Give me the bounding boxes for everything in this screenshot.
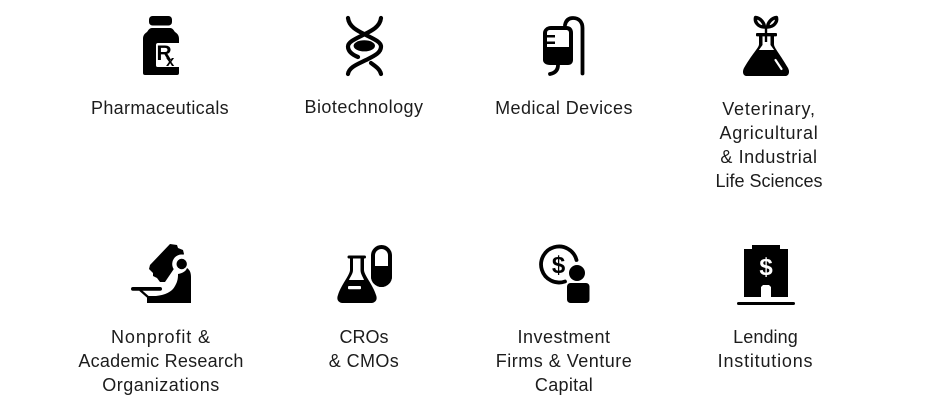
label: Investment Firms and Venture Capital: Investment <box>517 327 611 347</box>
icon: microscope <box>131 244 191 303</box>
label: Nonprofit and Academic Research Organizations: Organizations <box>102 375 220 395</box>
icon: bank building: $ <box>759 254 773 281</box>
icon: investor with dollar coin <box>541 247 590 303</box>
icon: prescription bottle <box>143 16 179 75</box>
label: Biotechnology: Biotechnology <box>305 97 423 117</box>
icon: investor with dollar coin: $ <box>552 252 566 279</box>
label: CROs and CMOs: CROs <box>340 327 388 347</box>
label: Veterinary, Agricultural and Industrial Life Sciences: Agricultural <box>719 123 819 143</box>
label: Nonprofit and Academic Research Organizations <box>78 327 244 395</box>
label: Veterinary, Agricultural and Industrial Life Sciences: Veterinary, <box>722 99 816 119</box>
label: Nonprofit and Academic Research Organizations: Academic Research <box>78 351 244 371</box>
label: Medical Devices: Medical Devices <box>495 98 633 118</box>
label: Investment Firms and Venture Capital: Firms & Venture <box>496 351 632 371</box>
label: Veterinary, Agricultural and Industrial Life Sciences: Life Sciences <box>715 171 823 191</box>
label: Lending Institutions <box>718 327 813 371</box>
label: Lending Institutions: Institutions <box>718 351 813 371</box>
label: Investment Firms and Venture Capital <box>496 327 632 395</box>
label: Veterinary, Agricultural and Industrial Life Sciences: & Industrial <box>720 147 818 167</box>
icon: bank building <box>737 245 795 305</box>
icon: IV bag <box>543 18 582 74</box>
label: CROs and CMOs <box>329 327 399 371</box>
icon: flask and capsule <box>337 247 392 303</box>
label: Veterinary, Agricultural and Industrial Life Sciences <box>715 99 823 191</box>
label: Pharmaceuticals: Pharmaceuticals <box>91 98 229 118</box>
icon: flask with sprout <box>743 18 789 76</box>
icon: prescription bottle: R <box>156 42 172 65</box>
label: Investment Firms and Venture Capital: Capital <box>535 375 593 395</box>
icon: DNA helix <box>348 18 381 74</box>
label: Lending Institutions: Lending <box>733 327 798 347</box>
icon: prescription bottle: x <box>166 53 175 70</box>
label: CROs and CMOs: & CMOs <box>329 351 399 371</box>
label: Nonprofit and Academic Research Organizations: Nonprofit & <box>111 327 211 347</box>
